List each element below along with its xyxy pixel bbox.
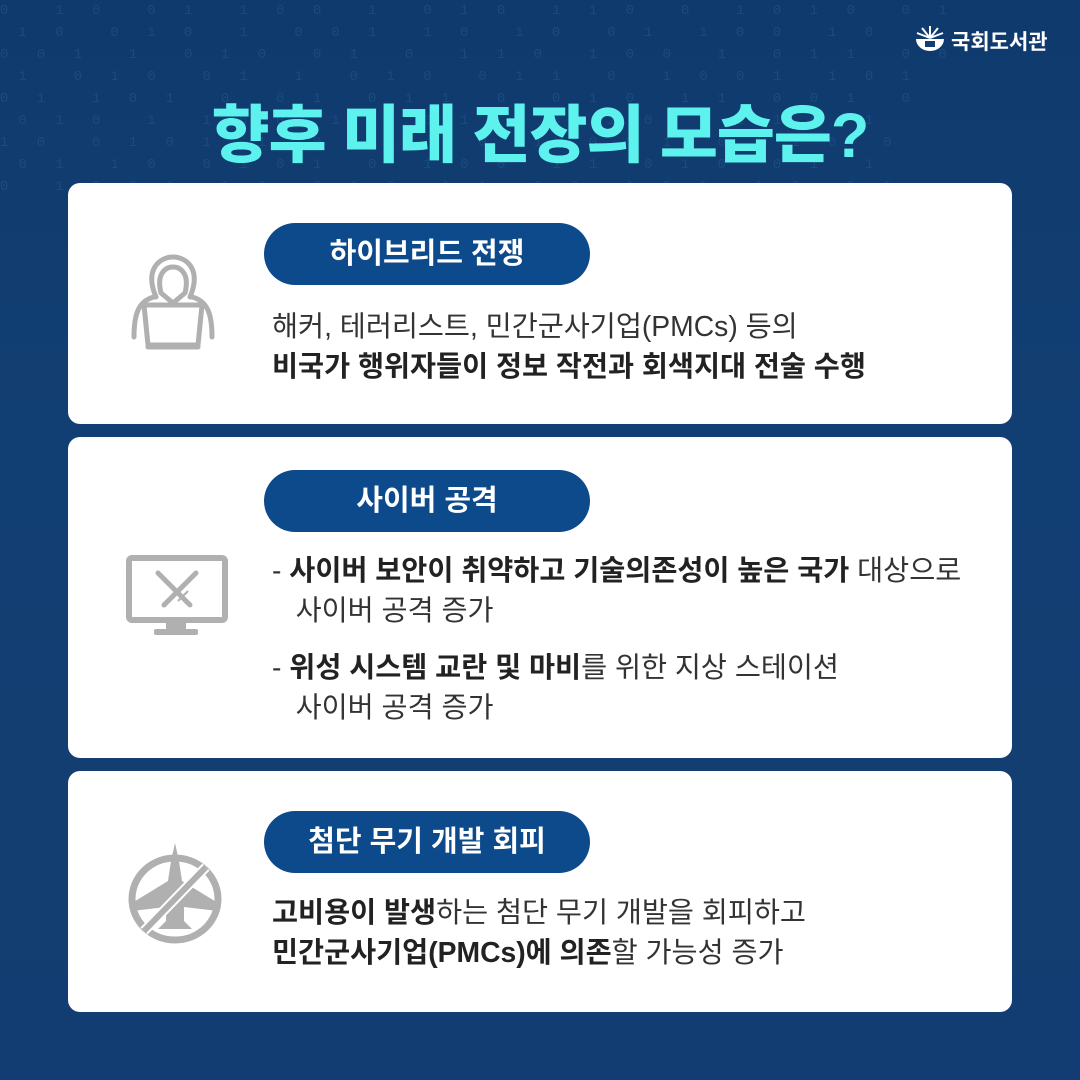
panel: cyber attack: - 위성 시스템 교란 및 마비를 위한 지상 스테이션 [272,651,839,683]
pill heading: 첨단 무기 개발 회피 [308,826,546,858]
panel: cyber attack: 사이버 공격 증가 [296,691,494,723]
text: 고비용이 발생하는 첨단 무기 개발을 회피하고 [272,896,806,928]
text: 비국가 행위자들이 정보 작전과 회색지대 전술 수행 [272,350,866,382]
panel: avoid advanced weapons [68,771,1012,1012]
pill heading: 하이브리드 전쟁 [330,238,524,270]
text: 0 1 0 0 1 1 0 0 1 0 1 0 1 1 0 0 1 0 1 0 0 1 1 0 0 1 0 1 0 0 1 1 0 1 0 0 1 1 0 0 1 0 1 0 0 1 1 0 1 0 0 1 0 1 1 0 1 0 0 1 0 1 1 0 0 1 0 1 0 0 1 1 0 1 0 0 1 1 0 1 0 0 1 1 0 1 0 1 1 0 1 0 0 1 0 1 1 0 0 1 0 1 1 0 0 1 0 0 1 0 1 1 0 0 1 0 0 1 1 0 1 0 0 1 1 0 1 1 0 0 1 0 1 1 0 0 1 1 0 1 0 0 1 0 1 1 0 0 0 1 1 0 0 1 0 1 0 1 0 0 1 1 0 1 0 0 1 1 0 1 0 0 1 1 0 0 1 0 1 1 0 0 1 0 1 1 0 0 1 [0,3,957,195]
pill heading: 사이버 공격 [356,485,498,517]
logo [916,26,1048,54]
logo: 국회도서관 [951,31,1048,54]
pill heading [264,470,590,532]
text: 사이버 공격 증가 [296,594,494,626]
text [272,554,961,626]
title: 향후 미래 전장의 모습은? [212,101,868,171]
text: - 사이버 보안이 취약하고 기술의존성이 높은 국가 대상으로 [272,554,961,586]
pill heading [264,223,590,285]
pill heading [264,811,590,873]
icon: no jet [128,843,222,944]
text: 민간군사기업(PMCs)에 의존할 가능성 증가 [272,936,784,968]
icon: hacker [132,254,214,350]
text [272,896,806,968]
panel: cyber attack [68,437,1012,758]
panel: hybrid war [68,183,1012,424]
text: 해커, 테러리스트, 민간군사기업(PMCs) 등의 [272,310,798,342]
icon: monitor swords [126,555,228,635]
text [272,310,866,382]
